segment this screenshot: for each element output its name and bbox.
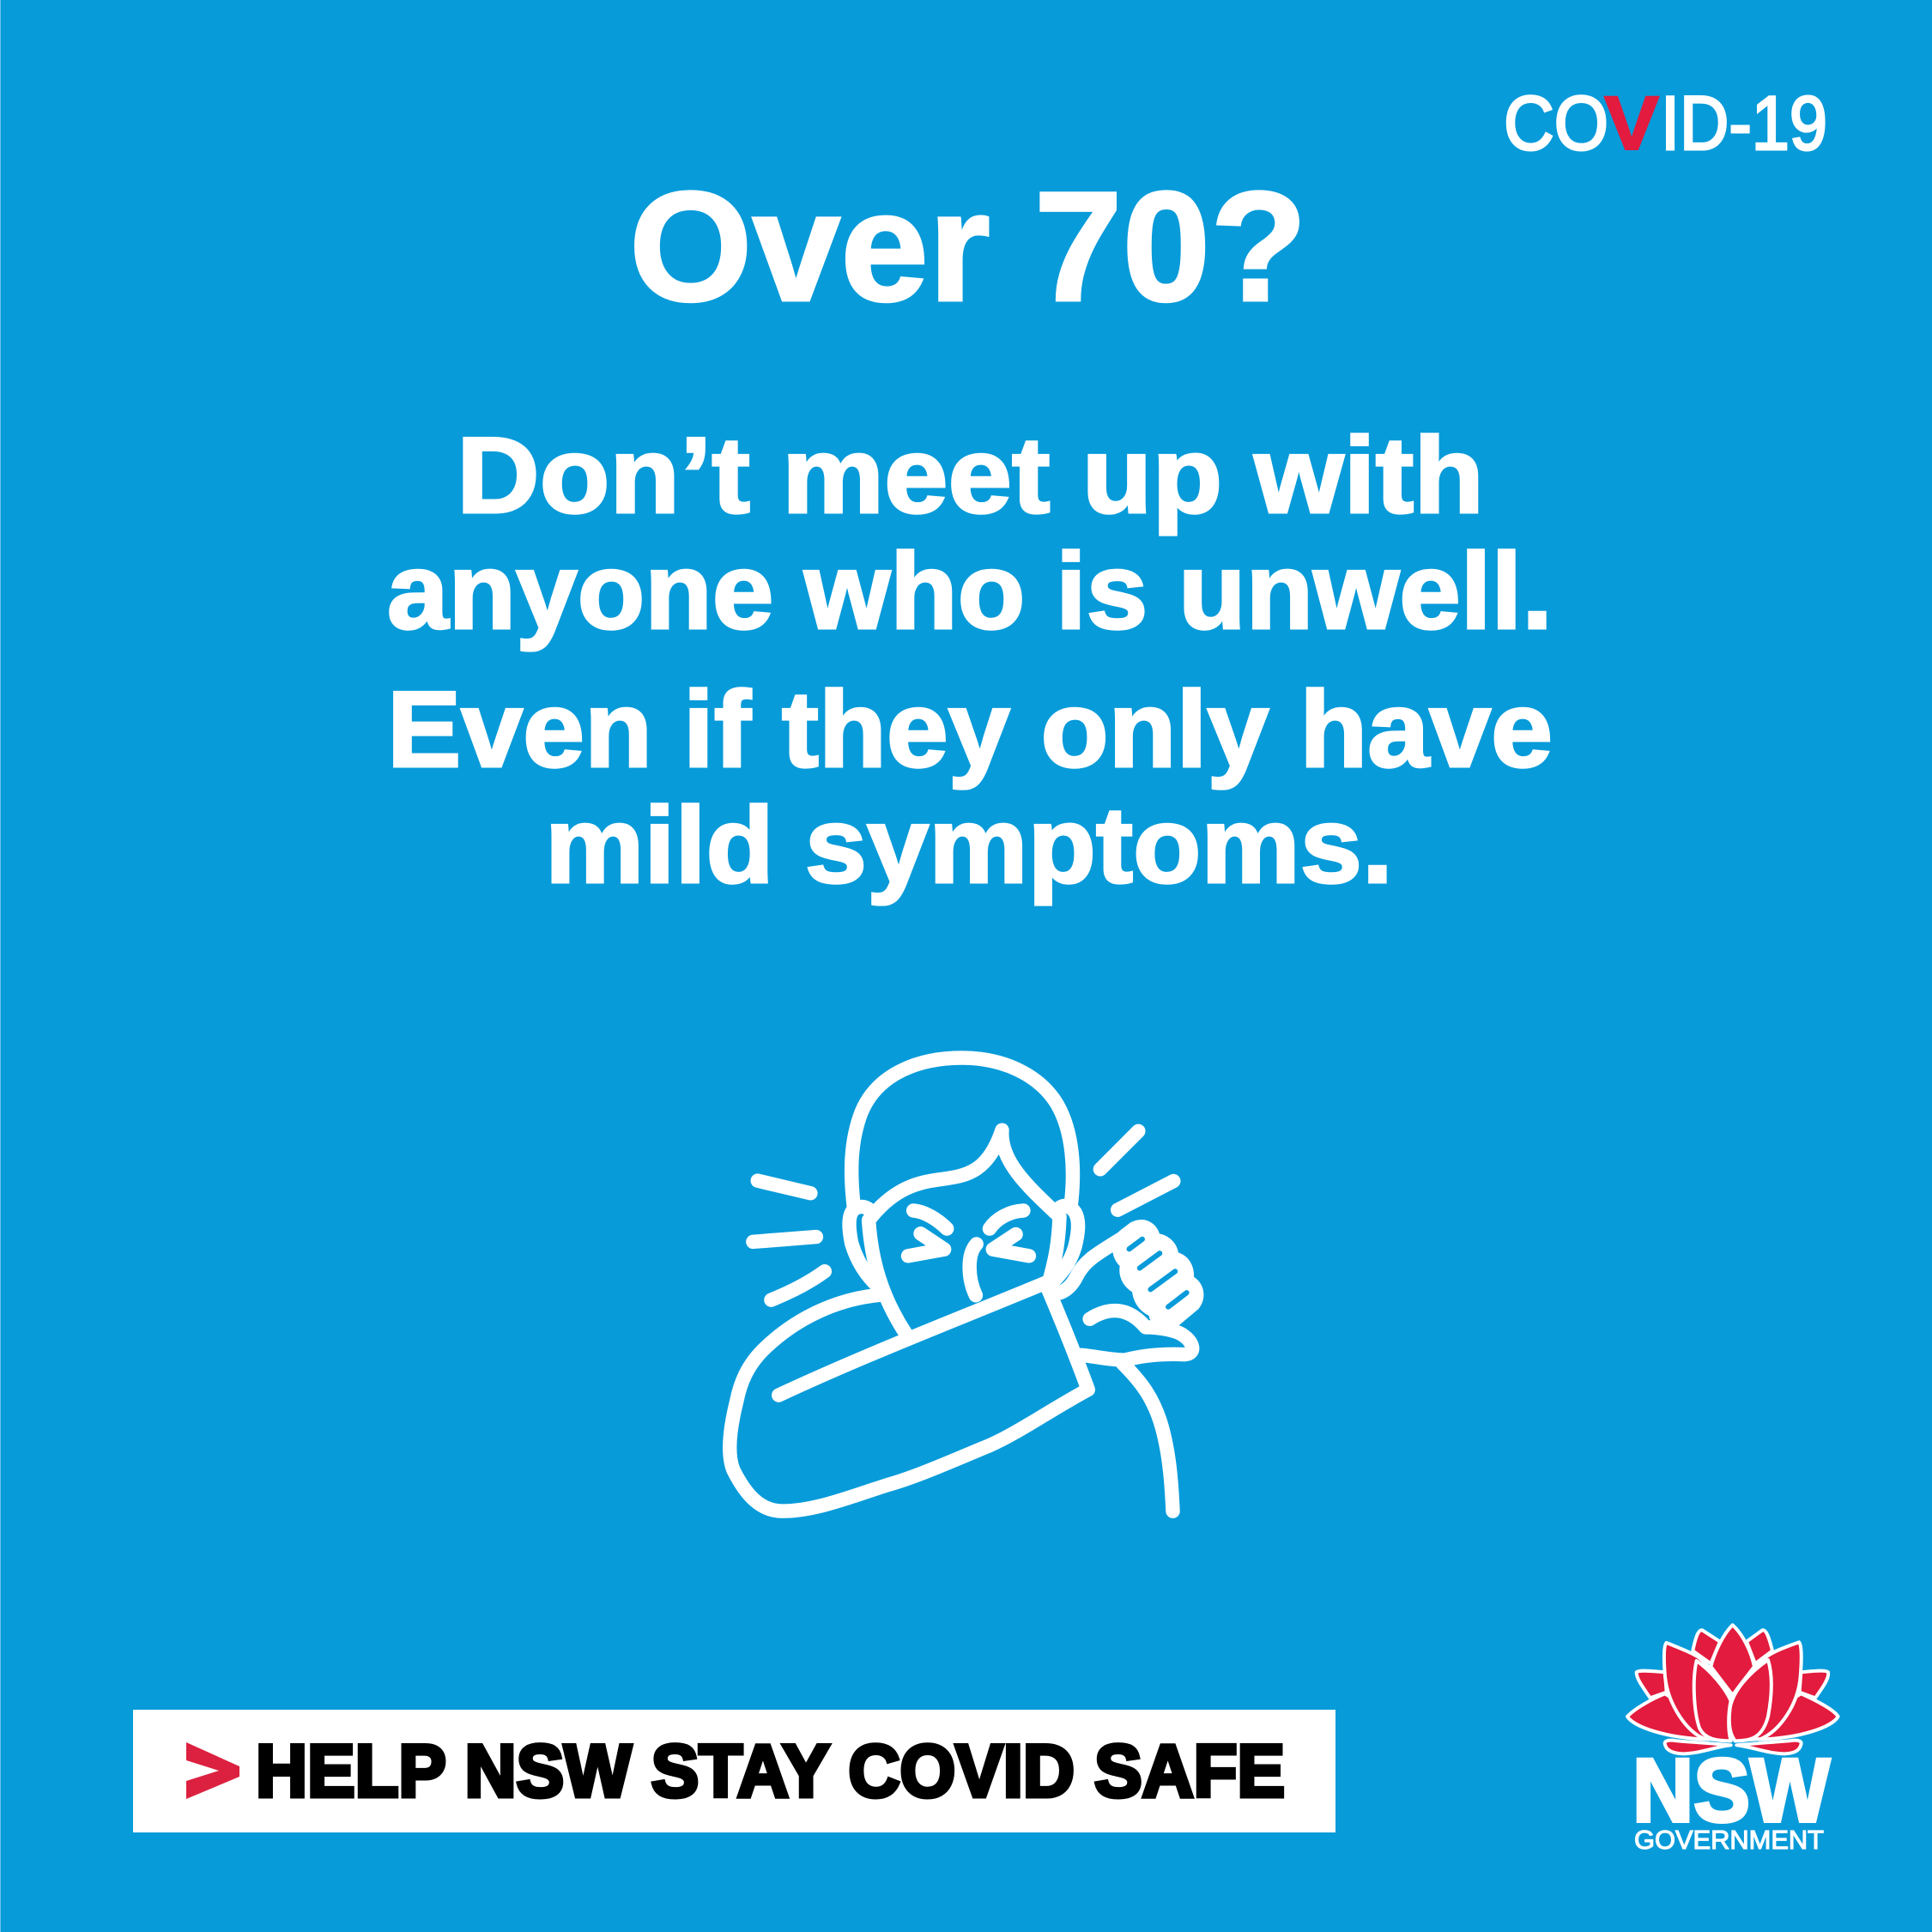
logo: waratah flower (1627, 1625, 1838, 1753)
banner chevron (186, 1742, 239, 1799)
icon: raised arm and sleeve (730, 1283, 1088, 1511)
message: do not meet unwell people (387, 415, 1553, 651)
icon: wrist and forearm (1060, 1237, 1124, 1293)
logo: COVID-19 wordmark: CO (1504, 80, 1608, 166)
icon: head and hair outline (851, 1058, 1073, 1208)
message: even with mild symptoms: mild symptoms. (545, 784, 1393, 905)
logo: COVID-19 wordmark: V (1604, 80, 1659, 166)
icon: thumb and shoulder (1081, 1311, 1192, 1511)
icon: ears (850, 1206, 1078, 1287)
logo: NSW Government (1627, 1625, 1838, 1855)
icon: cough lines (753, 1131, 1173, 1300)
logo: NSW letters: NSW (1632, 1741, 1830, 1841)
icon: squinting eyes and nose (908, 1210, 1029, 1295)
banner text: HELP NSW STAY COVID SAFE (256, 1730, 1285, 1813)
icon: person coughing into elbow (730, 1058, 1196, 1511)
icon: face sides (869, 1217, 1059, 1334)
logo: COVID-19 wordmark (1504, 80, 1827, 166)
message: do not meet unwell people: Don’t meet up with (457, 415, 1484, 536)
icon: hair fringe (869, 1130, 1059, 1220)
icon: finger gaps (1130, 1239, 1187, 1307)
logo: GOVERNMENT: GOVERNMENT (1634, 1825, 1824, 1855)
icon: fist (1119, 1226, 1196, 1323)
message: do not meet unwell people: anyone who is unwell. (387, 530, 1553, 651)
banner: help NSW stay COVID safe (133, 1710, 1335, 1832)
message: even with mild symptoms (387, 669, 1553, 905)
message: even with mild symptoms: Even if they only have (387, 669, 1553, 790)
title: Over 70? (629, 159, 1307, 334)
logo: COVID-19 wordmark: ID-19 (1661, 80, 1827, 166)
